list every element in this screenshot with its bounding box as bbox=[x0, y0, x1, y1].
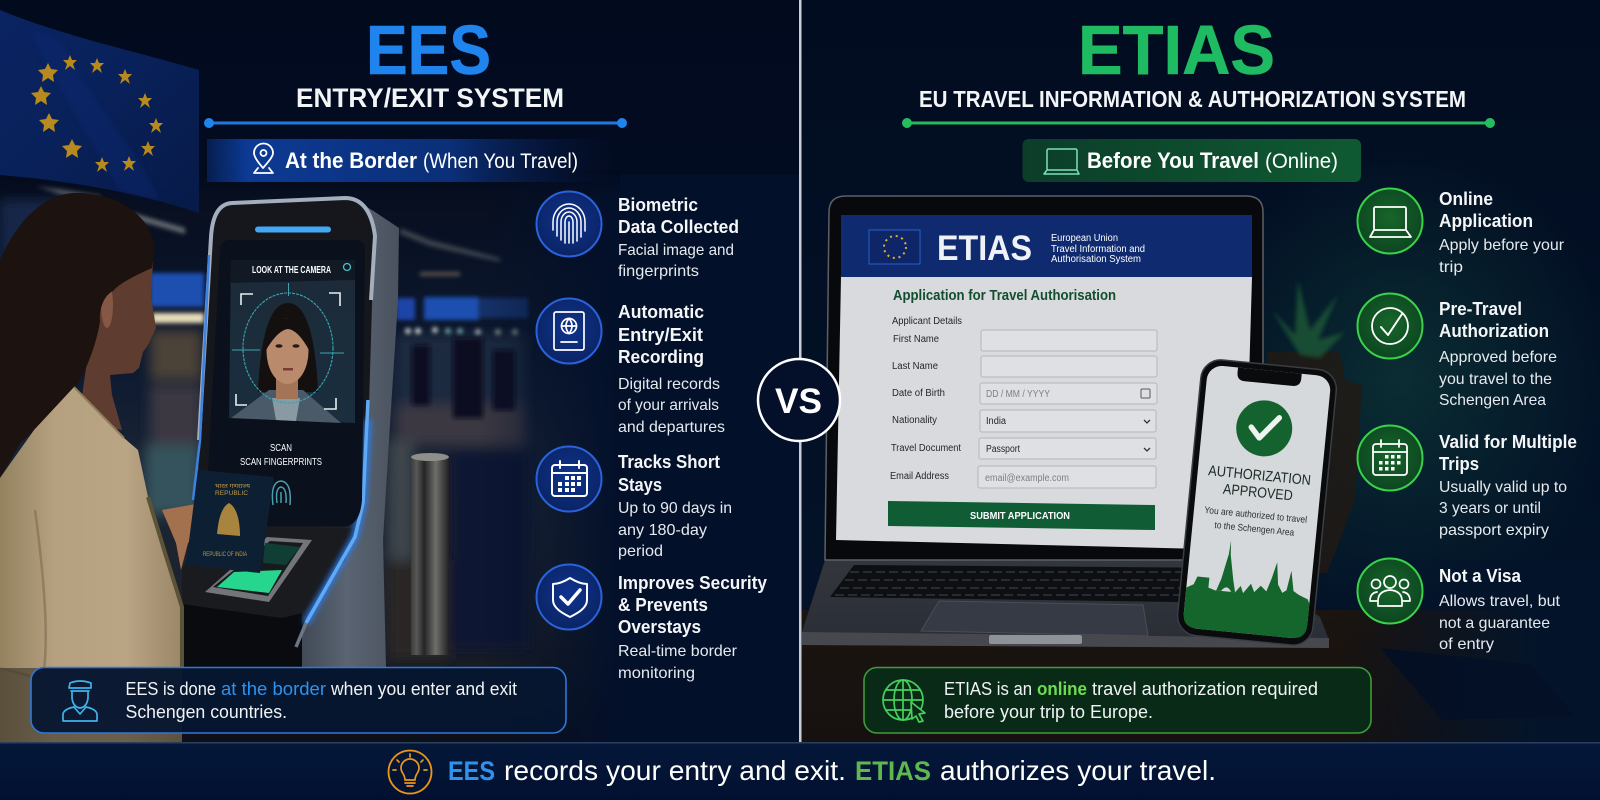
photo: green ambient glow bbox=[1180, 140, 1600, 620]
laptop screen form: Date of Birth bbox=[892, 388, 945, 399]
banner: before you travel bbox=[1022, 139, 1361, 182]
item: short stays: Up to 90 days in bbox=[618, 500, 732, 517]
icon: calendar bbox=[1358, 426, 1422, 490]
button: submit application bbox=[888, 501, 1155, 530]
item: multiple trips: passport expiry bbox=[1439, 522, 1549, 539]
photo: airport background bbox=[0, 170, 800, 743]
item: security: monitoring bbox=[618, 665, 695, 682]
kiosk screen panel: LOOK AT THE CAMERA bbox=[252, 265, 331, 276]
item: biometric data: Data Collected bbox=[618, 217, 739, 237]
icon: fingerprint bbox=[536, 192, 602, 256]
laptop lid bbox=[825, 196, 1263, 560]
hair bbox=[0, 193, 155, 478]
hand bbox=[162, 502, 207, 570]
divider: centre line bbox=[799, 0, 802, 743]
photo: passport bbox=[186, 470, 274, 573]
item: online application: Online bbox=[1439, 189, 1493, 209]
banner: at the border: At the Border bbox=[285, 148, 417, 173]
item: automatic recording: Recording bbox=[618, 347, 704, 367]
face and neck bbox=[70, 262, 156, 430]
coat bbox=[0, 387, 182, 743]
item: short stays: period bbox=[618, 543, 663, 560]
item: pre-travel authorization: Authorization bbox=[1439, 321, 1549, 341]
banner: at the border: (When You Travel) bbox=[423, 150, 578, 173]
badge: VS bbox=[758, 359, 840, 441]
item: short stays: Stays bbox=[618, 475, 662, 495]
item: online application: Application bbox=[1439, 211, 1533, 231]
heading: ETIAS: ETIAS bbox=[1078, 11, 1275, 89]
item: multiple trips: 3 years or until bbox=[1439, 500, 1541, 517]
callout: ETIAS online: before your trip to Europe. bbox=[944, 701, 1153, 722]
bottom summary bar: ETIAS bbox=[855, 756, 931, 786]
laptop screen form: India bbox=[986, 416, 1006, 427]
callout: EES at the border: when you enter and exit bbox=[330, 678, 517, 699]
callout: ETIAS online: ETIAS is an bbox=[944, 678, 1032, 699]
site header bbox=[841, 215, 1252, 277]
icon: EU flag bbox=[869, 230, 920, 264]
bottom summary bar bbox=[0, 742, 1600, 800]
keyboard keys bbox=[835, 572, 1190, 595]
item: security: Improves Security bbox=[618, 573, 767, 593]
laptop screen form: DD / MM / YYYY bbox=[986, 389, 1050, 400]
photo: wooden table bbox=[801, 560, 1600, 743]
icon: people group bbox=[1358, 558, 1422, 624]
icon: approved check bbox=[1234, 398, 1295, 459]
button: submit application: SUBMIT APPLICATION bbox=[970, 511, 1070, 522]
photo: passport: भारत गणराज्य bbox=[215, 483, 250, 490]
item: not a visa: of entry bbox=[1439, 636, 1494, 653]
photo: potted plant bbox=[1267, 280, 1362, 573]
item: not a visa: Allows travel, but bbox=[1439, 593, 1561, 610]
item: short stays: Tracks Short bbox=[618, 452, 720, 472]
laptop screen form: Applicant Details bbox=[892, 316, 962, 327]
illustration: phone with approval: AUTHORIZATION bbox=[1208, 463, 1312, 489]
icon: passport bbox=[536, 298, 602, 364]
site header: Travel Information and bbox=[1051, 244, 1145, 255]
icon: calendar bbox=[536, 446, 602, 512]
callout: EES at the border bbox=[31, 668, 566, 733]
photo: kiosk: SCAN FINGERPRINTS bbox=[240, 456, 322, 468]
illustration: face on screen bbox=[231, 303, 341, 423]
icon: laptop bbox=[1044, 149, 1079, 174]
scanner plate bbox=[205, 537, 312, 602]
illustration: laptop bbox=[802, 196, 1329, 648]
divider: green title rule bbox=[902, 118, 1495, 128]
item: security: Real-time border bbox=[618, 643, 738, 660]
item: security: & Prevents bbox=[618, 595, 708, 615]
panel: ETIAS right side bbox=[801, 0, 1600, 743]
callout: EES at the border: at the border bbox=[221, 678, 326, 699]
item: not a visa: Not a Visa bbox=[1439, 566, 1522, 586]
site header: European Union bbox=[1051, 233, 1118, 244]
illustration: phone with approval: You are authorized to travel bbox=[1204, 505, 1307, 526]
icon: camera lens bbox=[286, 244, 298, 256]
laptop screen form: Application for Travel Authorisation bbox=[893, 287, 1116, 304]
banner: before you travel: Before You Travel bbox=[1087, 148, 1259, 173]
laptop base bbox=[802, 560, 1329, 648]
item: multiple trips: Usually valid up to bbox=[1439, 479, 1567, 496]
banner: before you travel: (Online) bbox=[1265, 150, 1338, 173]
laptop screen form: email@example.com bbox=[985, 473, 1069, 484]
item: security bbox=[536, 564, 767, 682]
laptop screen form: Email Address bbox=[890, 471, 949, 482]
bottom summary bar: EES bbox=[448, 756, 495, 786]
item: automatic recording: of your arrivals bbox=[618, 397, 719, 414]
laptop screen form: Passport bbox=[986, 444, 1020, 455]
heading: EES: EES bbox=[366, 11, 491, 89]
photo: EU flag bbox=[0, 10, 199, 213]
kiosk shelf bbox=[182, 525, 355, 618]
photo: passport: REPUBLIC OF INDIA bbox=[203, 551, 247, 558]
item: biometric data: Facial image and bbox=[618, 242, 734, 259]
kiosk screen panel bbox=[229, 260, 355, 423]
panel: EES left side bbox=[0, 0, 800, 743]
item: automatic recording: and departures bbox=[618, 419, 725, 436]
icon: location pin bbox=[254, 144, 273, 173]
illustration: skyline bbox=[1182, 537, 1315, 639]
photo: passport: REPUBLIC bbox=[215, 490, 248, 497]
item: multiple trips: Valid for Multiple bbox=[1439, 432, 1577, 452]
bottom summary bar: authorizes your travel. bbox=[940, 755, 1216, 786]
item: security: Overstays bbox=[618, 617, 701, 637]
laptop screen form: Travel Document bbox=[891, 443, 961, 454]
item: pre-travel authorization: Pre-Travel bbox=[1439, 299, 1522, 319]
site header: Authorisation System bbox=[1051, 254, 1141, 265]
callout: EES at the border: Schengen countries. bbox=[126, 701, 287, 722]
laptop screen form: Last Name bbox=[892, 361, 938, 372]
laptop screen form: First Name bbox=[893, 334, 939, 345]
illustration: phone with approval: APPROVED bbox=[1222, 482, 1293, 504]
banner: at the border bbox=[207, 139, 612, 182]
item: automatic recording: Digital records bbox=[618, 376, 720, 393]
photo: passport on table bbox=[1380, 648, 1575, 720]
icon: LED bar bbox=[255, 226, 331, 232]
bottom summary bar: records your entry and exit. bbox=[504, 755, 846, 786]
item: multiple trips: Trips bbox=[1439, 454, 1479, 474]
icon: check circle bbox=[1358, 294, 1422, 358]
site header: ETIAS bbox=[937, 229, 1032, 268]
kiosk front bezel bbox=[198, 198, 374, 527]
item: pre-travel authorization: you travel to the bbox=[1439, 371, 1552, 388]
item: multiple trips bbox=[1358, 426, 1577, 539]
item: pre-travel authorization: Schengen Area bbox=[1439, 392, 1546, 409]
icon: border officer bbox=[63, 681, 97, 721]
item: biometric data bbox=[536, 192, 739, 280]
divider: blue title rule bbox=[204, 118, 627, 128]
item: biometric data: fingerprints bbox=[618, 263, 699, 280]
kiosk side body bbox=[294, 197, 399, 667]
item: not a visa bbox=[1358, 558, 1561, 653]
illustration: phone with approval bbox=[1176, 358, 1338, 647]
item: biometric data: Biometric bbox=[618, 195, 698, 215]
item: automatic recording: Automatic bbox=[618, 302, 704, 322]
heading: Entry/Exit System: ENTRY/EXIT SYSTEM bbox=[296, 83, 564, 113]
heading: EU Travel Information & Authorization System: EU TRAVEL INFORMATION & AUTHORIZATION SYSTEM bbox=[919, 86, 1466, 112]
laptop screen form: Nationality bbox=[892, 415, 937, 426]
icon: shield check bbox=[536, 564, 602, 630]
callout: ETIAS online: travel authorization required bbox=[1092, 678, 1318, 699]
icon: globe with cursor bbox=[883, 680, 925, 722]
photo: metal barrier pole bbox=[411, 453, 449, 655]
item: pre-travel authorization bbox=[1358, 294, 1557, 409]
badge: VS: VS bbox=[775, 382, 822, 421]
item: not a visa: not a guarantee bbox=[1439, 615, 1550, 632]
icon: light bulb bbox=[388, 750, 432, 794]
item: online application: trip bbox=[1439, 259, 1463, 276]
laptop screen form bbox=[836, 215, 1252, 550]
item: automatic recording bbox=[536, 298, 725, 436]
item: online application bbox=[1358, 188, 1565, 276]
callout: ETIAS online: online bbox=[1037, 678, 1087, 699]
callout: ETIAS online bbox=[864, 668, 1371, 733]
item: short stays bbox=[536, 446, 732, 560]
item: automatic recording: Entry/Exit bbox=[618, 325, 703, 345]
photo: kiosk bbox=[182, 197, 399, 667]
item: online application: Apply before your bbox=[1439, 237, 1565, 254]
photo: traveller woman bbox=[0, 193, 207, 743]
illustration: phone with approval: to the Schengen Area bbox=[1214, 520, 1295, 539]
photo: kiosk: SCAN bbox=[270, 442, 292, 454]
item: pre-travel authorization: Approved before bbox=[1439, 349, 1557, 366]
icon: laptop bbox=[1358, 188, 1422, 254]
item: short stays: any 180-day bbox=[618, 522, 707, 539]
callout: EES at the border: EES is done bbox=[126, 678, 216, 699]
